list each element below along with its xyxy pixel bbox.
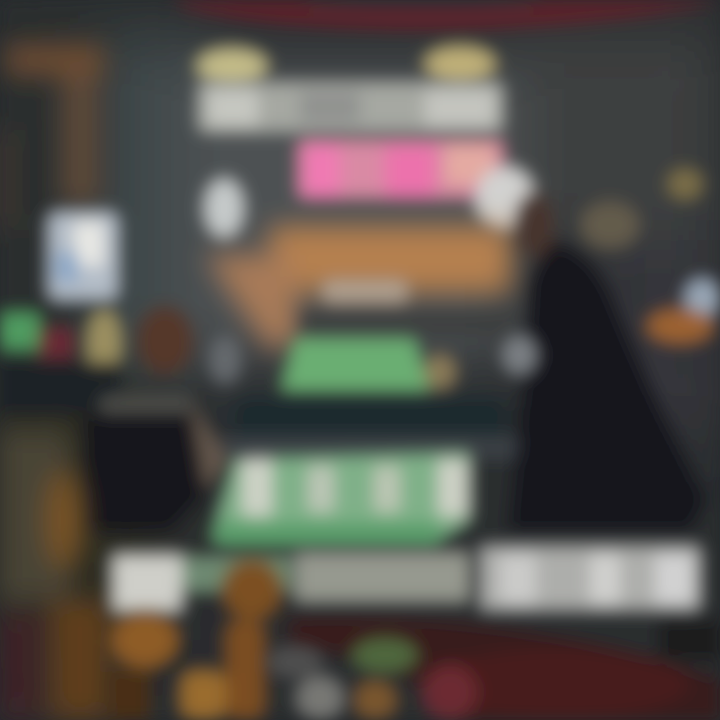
sign heading text band	[198, 82, 503, 132]
foreground figure left	[0, 430, 110, 720]
upper table sign	[210, 452, 470, 546]
bottom dark red table rim	[290, 617, 720, 720]
left wall warm lights	[0, 45, 105, 230]
seated figure left	[85, 306, 230, 530]
right wall lights	[502, 168, 720, 375]
bar counter highlights	[209, 280, 510, 384]
top sign lamps	[196, 46, 496, 84]
left screen	[48, 212, 118, 300]
green and red lights left	[0, 308, 122, 412]
table dark edge	[220, 398, 530, 460]
dark silhouette right	[510, 193, 705, 530]
orange bar counter	[205, 226, 510, 350]
bottom table items	[267, 637, 478, 720]
green felt table	[280, 338, 456, 392]
white globes	[204, 166, 535, 238]
orange foreground chips	[110, 560, 282, 720]
pink screens	[298, 140, 503, 198]
red ceiling arc	[170, 0, 720, 30]
lower sign text band	[112, 546, 700, 612]
